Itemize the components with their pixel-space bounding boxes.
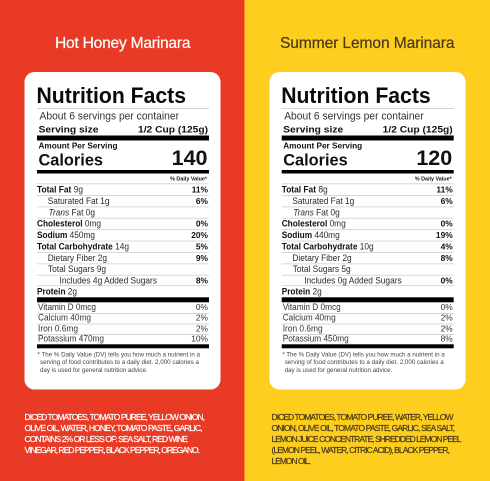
vitamins and minerals: Vitamin D 0mcg bbox=[38, 301, 96, 312]
nutrient rows: 20% bbox=[191, 230, 209, 240]
nutrient rows: 9% bbox=[196, 253, 209, 263]
nutrient rows: 11% bbox=[436, 185, 453, 195]
vitamins and minerals: 0% bbox=[196, 302, 209, 312]
vitamins and minerals bbox=[38, 301, 209, 344]
vitamins and minerals: 2% bbox=[441, 324, 453, 334]
nutrient rows: Dietary Fiber 2g bbox=[48, 252, 107, 263]
calories: Calories bbox=[38, 150, 103, 170]
calories: 120 bbox=[416, 146, 452, 170]
nutrient rows: Saturated Fat 1g bbox=[292, 195, 354, 206]
calories: Calories bbox=[283, 150, 348, 170]
text block: hot honey ingredients: DICED TOMATOES, TOMATO PUREE, YELLOW ONION, bbox=[24, 412, 205, 422]
nutrient rows: Trans Fat 0g bbox=[293, 206, 340, 218]
daily value header: % Daily Value* bbox=[415, 176, 453, 182]
text block: hot honey ingredients: CONTAINS 2% OR LESS OF: SEA SALT, RED WINE bbox=[24, 434, 188, 444]
nutrient rows: 11% bbox=[192, 185, 209, 195]
amount per serving: Amount Per Serving bbox=[283, 140, 362, 150]
vitamins and minerals: 10% bbox=[191, 334, 209, 344]
nutrient rows: Protein 2g bbox=[37, 286, 77, 296]
nutrient rows: Protein 2g bbox=[282, 286, 322, 296]
vitamins and minerals bbox=[283, 301, 453, 344]
nutrient rows: Total Sugars 5g bbox=[293, 263, 351, 274]
card background bbox=[270, 72, 466, 390]
footnote bbox=[282, 352, 445, 374]
footnote: day is used for general nutrition advice. bbox=[285, 367, 392, 374]
nutrient rows: Total Carbohydrate 10g bbox=[282, 240, 374, 252]
vitamins and minerals: 2% bbox=[196, 313, 209, 323]
amount per serving: Amount Per Serving bbox=[38, 140, 118, 150]
vitamins and minerals: Iron 0.6mg bbox=[283, 322, 323, 334]
text block: summer lemon ingredients: (LEMON PEEL, WATER, CITRIC ACID), BLACK PEPPER, bbox=[272, 445, 450, 455]
footnote: * The % Daily Value (DV) tells you how much a nutrient in a bbox=[38, 352, 200, 359]
panel: hot honey background bbox=[0, 0, 244, 481]
vitamins and minerals: Calcium 40mg bbox=[38, 312, 91, 323]
nutrient rows: 0% bbox=[196, 219, 209, 229]
nutrient rows: 19% bbox=[436, 230, 453, 240]
vitamins and minerals: 2% bbox=[441, 313, 453, 323]
daily value header: % Daily Value* bbox=[170, 176, 208, 182]
nutrient rows bbox=[282, 184, 453, 296]
vitamins and minerals: Potassium 470mg bbox=[38, 333, 104, 344]
nutrient rows: Total Fat 8g bbox=[282, 184, 328, 195]
nutrient rows: Cholesterol 0mg bbox=[282, 218, 346, 229]
title: Nutrition Facts: Nutrition Facts bbox=[36, 83, 186, 108]
text block: hot honey ingredients: VINEGAR, RED PEPPER, BLACK PEPPER, OREGANO. bbox=[24, 445, 200, 455]
nutrient rows: Total Fat 9g bbox=[37, 184, 83, 195]
footnote: serving of food contributes to a daily diet. 2,000 calories a bbox=[285, 359, 444, 366]
panel: summer lemon background bbox=[244, 0, 490, 481]
text block: hot honey ingredients: OLIVE OIL, WATER, HONEY, TOMATO PASTE, GARLIC, bbox=[24, 423, 203, 433]
footnote: day is used for general nutrition advice. bbox=[40, 367, 148, 374]
calories bbox=[283, 146, 452, 170]
nutrient rows: Includes 4g Added Sugars bbox=[60, 274, 157, 286]
serving size: Serving size bbox=[283, 124, 343, 136]
text block: summer lemon ingredients: LEMON JUICE CONCENTRATE, SHREDDED LEMON PEEL bbox=[272, 434, 462, 444]
vitamins and minerals: Vitamin D 0mcg bbox=[283, 301, 341, 312]
nutrient rows: 8% bbox=[196, 276, 209, 286]
heading: Hot Honey Marinara: Hot Honey Marinara bbox=[55, 35, 191, 52]
nutrient rows: 6% bbox=[196, 196, 209, 206]
footnote: serving of food contributes to a daily diet. 2,000 calories a bbox=[40, 359, 199, 366]
title: Nutrition Facts: Nutrition Facts bbox=[281, 83, 431, 108]
text block: summer lemon ingredients: LEMON OIL. bbox=[272, 456, 311, 466]
nutrient rows: 6% bbox=[441, 196, 453, 206]
vitamins and minerals: Potassium 450mg bbox=[283, 333, 349, 344]
nutrient rows bbox=[37, 184, 209, 296]
nutrient rows: 0% bbox=[441, 219, 453, 229]
calories bbox=[38, 146, 208, 170]
footnote bbox=[38, 352, 200, 374]
nutrient rows: 5% bbox=[196, 242, 209, 252]
text block: summer lemon ingredients: DICED TOMATOES, TOMATO PUREE, WATER, YELLOW bbox=[272, 412, 454, 422]
vitamins and minerals: Calcium 40mg bbox=[283, 312, 336, 323]
serving size: 1/2 Cup (125g) bbox=[383, 124, 453, 136]
vitamins and minerals: 2% bbox=[196, 324, 209, 334]
nutrient rows: Saturated Fat 1g bbox=[48, 195, 110, 206]
calories: 140 bbox=[172, 146, 208, 170]
nutrient rows: Sodium 440mg bbox=[282, 229, 340, 240]
text block: summer lemon ingredients bbox=[272, 412, 462, 466]
text block: hot honey ingredients bbox=[24, 412, 205, 455]
nutrient rows: Sodium 450mg bbox=[37, 229, 95, 240]
panel: summer lemon nutrition card bbox=[270, 72, 466, 390]
nutrient rows: 8% bbox=[441, 253, 453, 263]
footnote: * The % Daily Value (DV) tells you how much a nutrient in a bbox=[282, 352, 445, 359]
serving size bbox=[38, 124, 208, 136]
card background bbox=[24, 72, 220, 390]
nutrient rows: 0% bbox=[441, 276, 453, 286]
text block: summer lemon ingredients: ONION, OLIVE OIL, TOMATO PASTE, GARLIC, SEA SALT, bbox=[272, 423, 455, 433]
nutrient rows: Trans Fat 0g bbox=[48, 206, 95, 218]
nutrient rows: Includes 0g Added Sugars bbox=[304, 274, 402, 286]
serving size bbox=[283, 124, 453, 136]
nutrient rows: 4% bbox=[441, 242, 453, 252]
heading: Summer Lemon Marinara: Summer Lemon Marinara bbox=[280, 35, 455, 52]
panel: hot honey nutrition card bbox=[24, 72, 220, 390]
vitamins and minerals: Iron 0.6mg bbox=[38, 322, 78, 334]
servings per container: About 6 servings per container bbox=[284, 110, 424, 122]
nutrient rows: Cholesterol 0mg bbox=[37, 218, 101, 229]
nutrient rows: Total Carbohydrate 14g bbox=[37, 240, 129, 252]
servings per container: About 6 servings per container bbox=[40, 110, 179, 122]
serving size: 1/2 Cup (125g) bbox=[138, 124, 208, 136]
nutrient rows: Total Sugars 9g bbox=[48, 263, 106, 274]
serving size: Serving size bbox=[38, 124, 98, 136]
vitamins and minerals: 8% bbox=[441, 334, 453, 344]
vitamins and minerals: 0% bbox=[441, 302, 453, 312]
nutrient rows: Dietary Fiber 2g bbox=[292, 252, 352, 263]
